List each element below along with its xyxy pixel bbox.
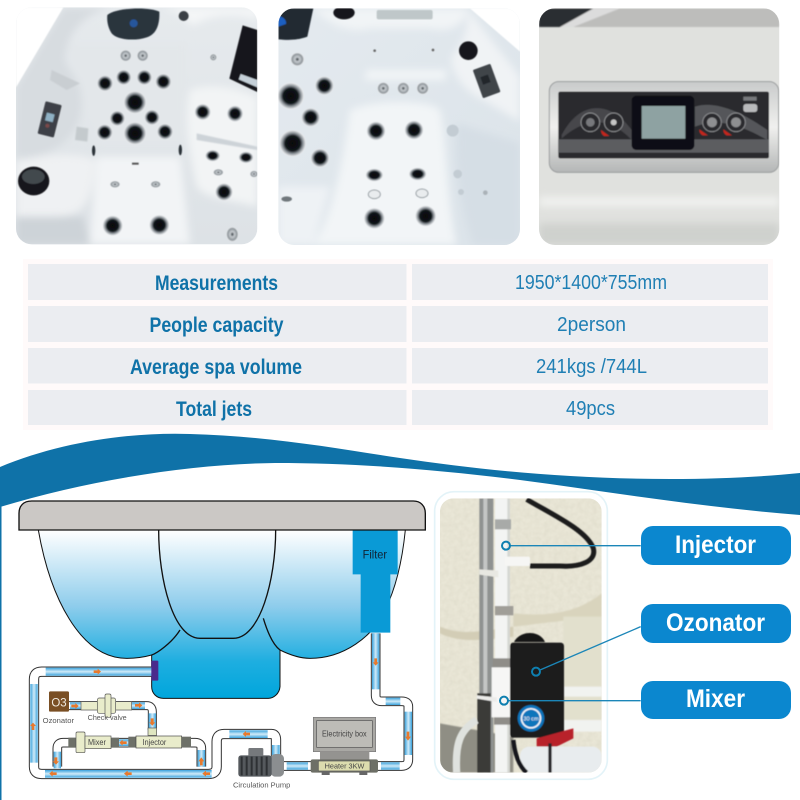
electricity box: Electricity box <box>322 730 367 739</box>
row labels: Total jets <box>176 398 252 421</box>
display <box>632 96 694 150</box>
ozonator: Ozonator <box>43 716 74 725</box>
ozonator box <box>510 633 564 738</box>
diagram: water circulation system <box>19 501 425 789</box>
heater <box>311 759 378 775</box>
photo: spa interior, side view <box>277 6 520 245</box>
headrest <box>278 8 313 40</box>
mixer: Mixer <box>88 738 106 747</box>
row values: 241kgs /744L <box>536 356 647 378</box>
injector: Injector <box>143 738 167 747</box>
pillow knob <box>18 167 49 195</box>
specification table <box>23 259 773 430</box>
pipe water segments <box>30 633 412 778</box>
ozonator: O3 <box>51 696 67 710</box>
red valve and fittings <box>456 720 602 773</box>
filter <box>353 530 398 633</box>
panel face <box>558 92 769 158</box>
row values: 1950*1400*755mm <box>515 272 667 294</box>
row labels: Average spa volume <box>130 356 302 379</box>
blue wave band <box>0 434 800 515</box>
left edge stripe <box>0 506 2 800</box>
electricity box <box>313 717 376 761</box>
photo: control panel <box>539 8 779 245</box>
outlet fitting <box>151 661 158 681</box>
callout: injector: Injector <box>675 531 756 559</box>
flow arrows <box>30 658 411 777</box>
jets <box>277 49 488 229</box>
top knob and skimmer <box>333 6 433 19</box>
wall speaker <box>229 25 257 92</box>
photo: spa interior, front view <box>16 7 258 244</box>
circulation pump <box>233 748 290 789</box>
filter: Filter <box>363 548 387 561</box>
row values: 2person <box>557 314 626 336</box>
row labels <box>130 272 302 421</box>
top-left cut corner <box>16 7 63 87</box>
ozonator box: 30 cm <box>523 716 539 722</box>
row values <box>515 272 667 420</box>
injector <box>128 728 191 748</box>
logo <box>743 97 757 112</box>
row labels: People capacity <box>150 314 284 337</box>
callout: injector <box>502 526 791 565</box>
control pad <box>38 101 62 138</box>
top-right cut corner <box>470 8 520 52</box>
panel frame <box>549 82 779 172</box>
callout: ozonator <box>532 604 791 676</box>
check valve <box>81 694 132 722</box>
buttons <box>581 113 745 136</box>
tub basin <box>38 530 405 698</box>
callout: mixer: Mixer <box>686 685 745 713</box>
check valve: Check valve <box>88 713 127 722</box>
heater: Heater 3KW <box>325 762 365 771</box>
piping outlines <box>34 633 408 774</box>
rim <box>19 501 425 530</box>
circulation pump: Circulation Pump <box>233 780 290 789</box>
white pipe <box>477 498 530 773</box>
row values: 49pcs <box>566 398 615 420</box>
callout: mixer <box>500 681 791 719</box>
aluminium rail <box>479 498 493 773</box>
photo: ozone system installation <box>435 492 607 779</box>
row labels: Measurements <box>155 272 278 295</box>
mixer <box>68 732 119 753</box>
black hose <box>527 499 594 566</box>
callout: ozonator: Ozonator <box>666 609 765 637</box>
ozonator <box>43 691 74 725</box>
ledge knob and pad <box>459 41 501 98</box>
headrest <box>107 8 189 40</box>
jets <box>92 50 258 242</box>
